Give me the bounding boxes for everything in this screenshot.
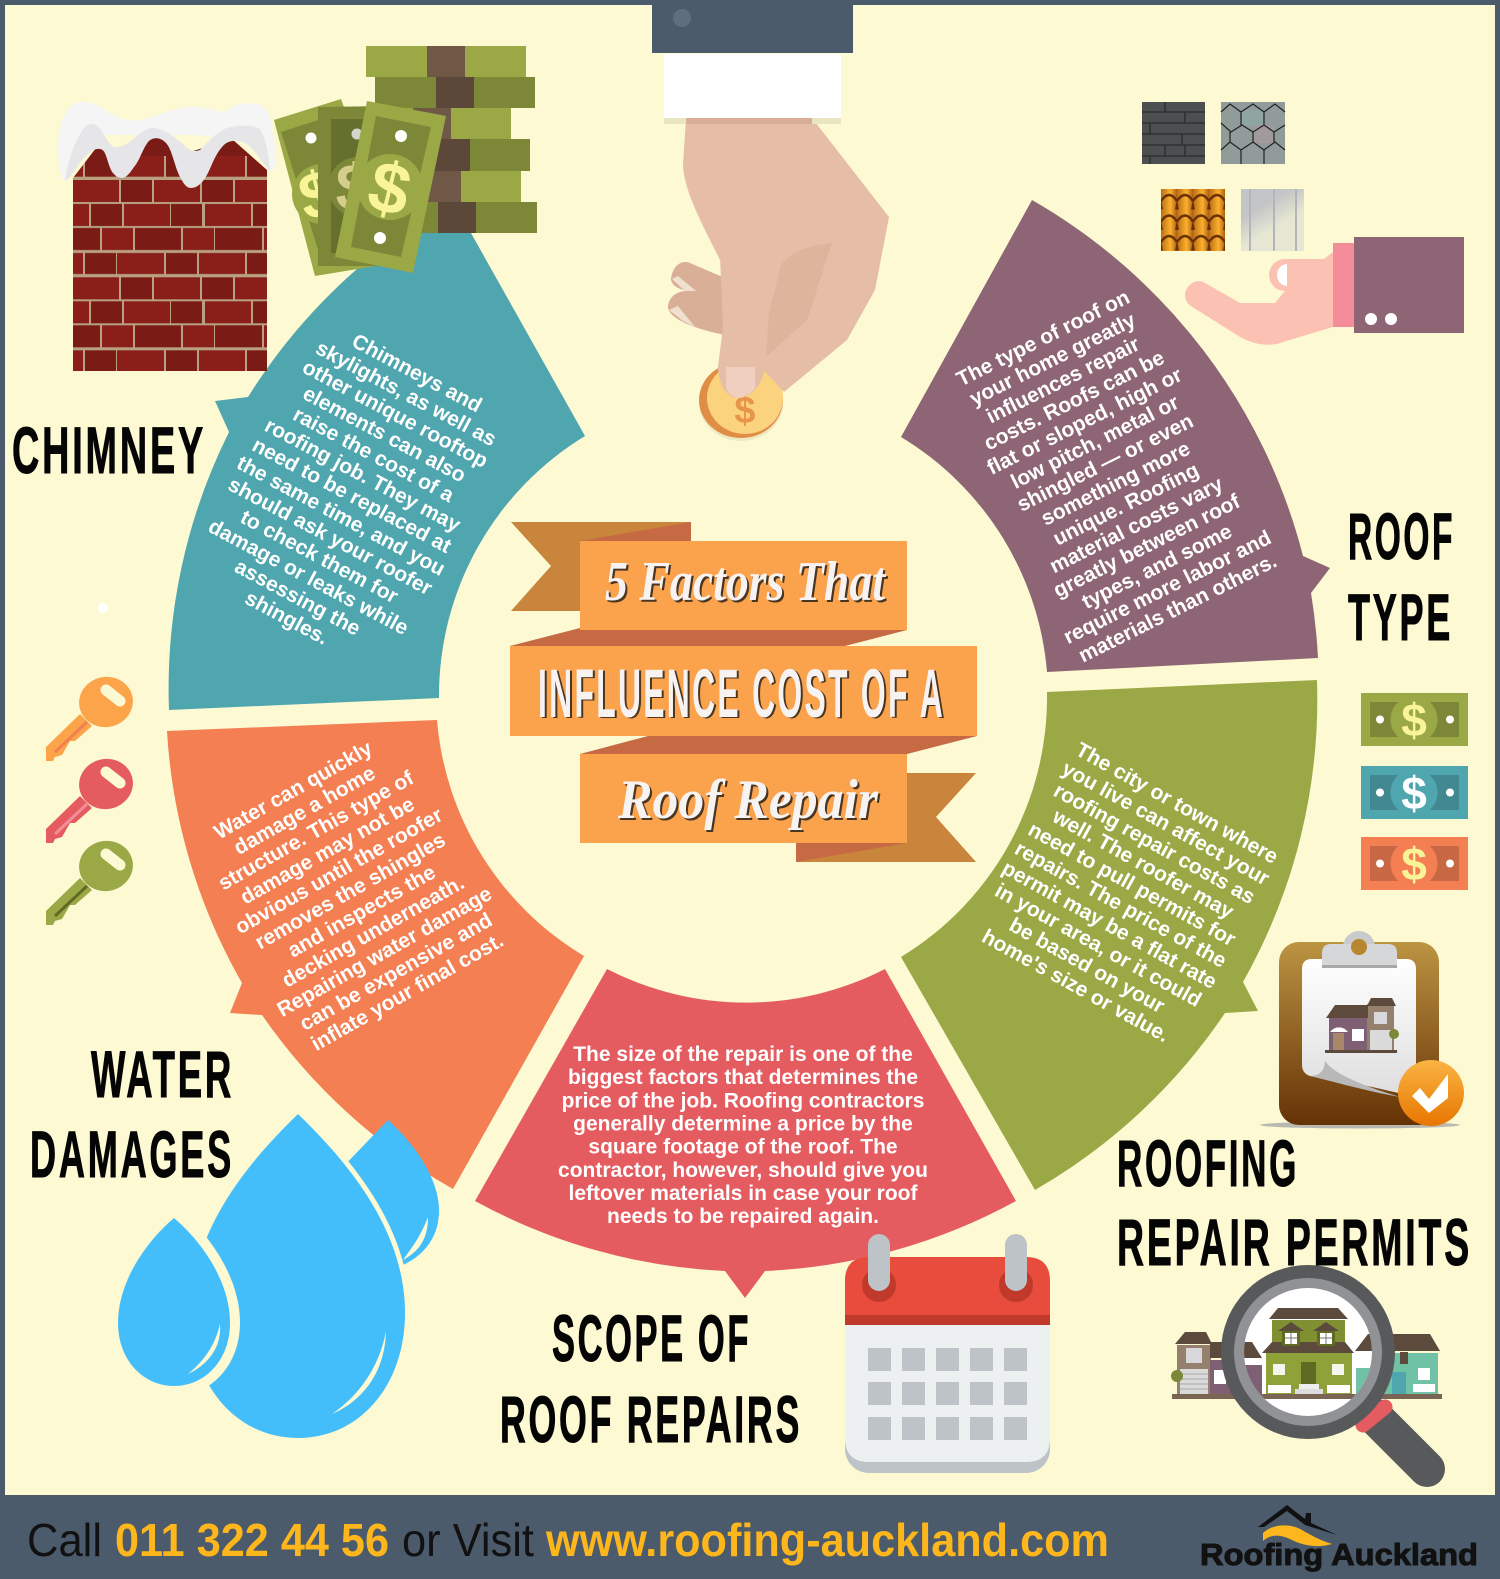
icons: keys [46,672,138,925]
icon: clipboard with house and check [1260,931,1464,1128]
text: roof type description: your home greatly [966,309,1140,411]
heading: roofing repair permits [1117,1126,1472,1279]
text: roof type description: influences repair [983,333,1143,428]
heading: water damages: DAMAGES [30,1117,234,1191]
key: orange [46,672,138,761]
text: roof type description: types, and some [1078,520,1236,614]
text: permits description: permit may be a flat rate [998,857,1220,994]
heading: scope of roof repairs: ROOF REPAIRS [500,1382,802,1456]
icon: middle banknote: $ [336,150,372,224]
text: chimney description: the same time, and you [233,452,449,581]
text: permits description: repairs. The price of the [1011,837,1230,973]
swatch: metal [1241,189,1304,251]
text: chimney description: raise the cost of a [289,403,458,507]
banknote: orange: $ [1401,838,1427,890]
pointing finger [718,255,781,398]
icon: front banknote [335,101,446,273]
text: permits description: well. The roofer may [1048,805,1238,924]
text: water damage description: Repairing water damage [273,882,496,1022]
text: roof type description: costs. Roofs can be [980,346,1168,455]
title ribbon [510,522,977,862]
text: roof type description: greatly between roof [1050,490,1245,602]
text: scope description: generally determine a price by the [573,1112,913,1135]
nail [726,367,755,398]
key: red [46,754,138,843]
banknote: teal [1361,766,1468,819]
white shirt cuff [664,54,841,124]
icon: brick chimney with snow [58,102,276,371]
icon: front banknote: $ [360,145,419,233]
text: water damage description: obvious until the roofer [231,803,447,939]
text: scope description: The size of the repair is one of the [573,1043,913,1066]
text: water damage description: removes the shingles [251,829,449,954]
title line 1: 5 Factors That [605,551,886,613]
text: chimney description: shingles. [241,587,332,650]
house: left [1171,1332,1262,1394]
text: scope description: square footage of the roof. The [588,1136,898,1159]
text: water damage description: decking underneath. [278,871,468,992]
title line 3: Roof Repair [619,771,881,833]
panel: scope wedge [475,969,1016,1298]
heading: roof type [1348,499,1455,654]
text: chimney description: should ask your roofer [224,473,436,600]
text: chimney description: assessing the [231,555,364,641]
text: scope description: price of the job. Roofing contractors [562,1089,924,1112]
back fingers [668,262,725,335]
banknote: green: $ [1401,694,1427,746]
text: water damage description: inflate your final cost. [307,929,508,1056]
text: chimney description: Chimneys and [348,330,486,417]
text: permits description: The city or town where [1072,738,1282,869]
footer: call to action [27,1514,1109,1566]
small dot [98,603,108,613]
text: permits description: be based on your [1005,914,1168,1018]
thumb shade [766,243,832,357]
text: permits description: in your area, or it could [991,879,1205,1012]
icon: small house [1325,998,1399,1053]
drop: left [118,1218,230,1386]
logo: Roofing Auckland [1200,1505,1478,1572]
heading: roofing repair permits: ROOFING [1117,1126,1299,1200]
lens ring [1221,1265,1395,1439]
icon: street of houses [1171,1332,1442,1399]
banknote: teal: $ [1401,767,1427,819]
suit cuff [652,5,853,53]
heading: water damages [30,1037,234,1191]
icon: left banknote: $ [291,154,345,235]
icon: hand holding coin [652,5,889,441]
panel: permits wedge [901,680,1317,1190]
title line 1: 5 Factors That [607,553,888,615]
icon: stack of money [274,46,537,276]
text: roof type description: flat or sloped, high or [983,363,1186,480]
icon: water drops [118,1114,439,1438]
text: roof type description: unique. Roofing [1049,459,1203,550]
text: chimney description: to check them for [236,506,402,608]
swatch: orange tile [1161,189,1225,251]
panel: chimney wedge [169,201,585,710]
coin [699,362,783,441]
banknote: orange [1361,837,1468,890]
heading: scope of roof repairs: SCOPE OF [552,1301,751,1375]
heading: chimney: CHIMNEY [12,413,206,487]
logo: Roofing Auckland: Roofing Auckland [1200,1537,1478,1572]
text: chimney description: roofing job. They may [261,414,465,537]
text: water damage description: structure. This type of [214,766,419,895]
icons: roof material swatches [1142,102,1304,251]
text: INFLUENCE COST OF A [540,656,947,733]
footer: call to action: www.roofing-auckland.com [545,1514,1109,1566]
drop: right [340,1120,439,1268]
palm [683,118,889,392]
text: chimney description: need to be replaced at [248,434,455,558]
footer: call to action: or Visit [402,1514,534,1566]
text: water damage description: damage may not be [237,793,419,909]
title line 3: Roof Repair [617,769,879,831]
text: roof type description: shingled — or even [1014,410,1197,517]
heading: water damages: WATER [91,1037,234,1111]
text: roof type description: materials than others. [1075,549,1281,667]
text: water damage description: damage a home [230,762,379,860]
text: scope description: contractor, however, should give you [558,1159,928,1182]
text: permits description: home's size or value. [978,925,1173,1047]
icon: calendar [845,1234,1050,1473]
text: water damage description: can be expensive and [296,909,496,1036]
text: roof type description: require more labor and [1060,526,1275,649]
heading: scope of roof repairs [500,1301,802,1456]
handle [1374,1416,1427,1469]
icon: magnifying glass with green house [1221,1265,1427,1469]
text: chimney description: elements can also [299,382,470,487]
footer: call to action: 011 322 44 56 [115,1514,389,1566]
swatch: grey scallop shingle [1221,102,1285,164]
text: roof type description: The type of roof on [953,286,1133,391]
text: chimney description: damage or leaks while [204,515,412,640]
text: scope description: needs to be repaired again. [607,1205,879,1228]
title line 2 [538,655,947,733]
text: roof type description: something more [1037,437,1194,531]
text: roof type description: low pitch, metal or [1007,391,1183,494]
text: water damage description: Water can quickly [210,736,377,844]
text: chimney description: other unique rooftop [299,356,492,473]
panel: roof type wedge [901,200,1330,672]
text: scope description: biggest factors that determines the [568,1066,918,1089]
icon: open hand with purple sleeve [1185,237,1464,345]
house: right [1355,1334,1440,1394]
text: scope description: leftover materials in case your roof [569,1182,918,1205]
icons: banknotes [1361,693,1468,890]
footer: call to action: Call [27,1514,102,1566]
text: permits description: you live can affect your [1058,757,1273,890]
banknote: green [1361,693,1468,746]
drop: large [191,1114,405,1438]
green house [1240,1308,1380,1399]
panel: water damage wedge [167,720,584,1189]
coin: $ [734,390,756,432]
icon: middle banknote [318,106,400,266]
swatch: dark shingle [1142,102,1205,164]
text: chimney description: skylights, as well as [312,337,500,451]
text: INFLUENCE COST OF A [538,655,945,732]
text: roof type description: material costs vary [1046,472,1227,578]
icon: left banknote [274,99,400,276]
text: permits description: roofing repair costs as [1050,779,1259,909]
text: water damage description: and inspects the [284,861,440,962]
footer bar [0,1495,1500,1579]
key: green [46,836,138,925]
text: permits description: need to pull permits for [1024,818,1239,951]
